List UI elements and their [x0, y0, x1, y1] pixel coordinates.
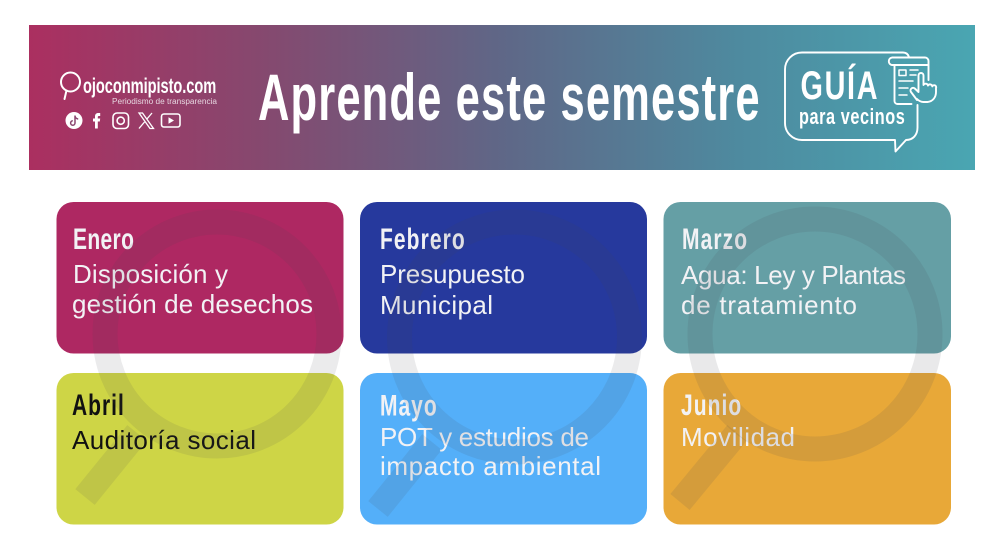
card: Mayo	[360, 373, 647, 524]
card: Abril	[56, 373, 344, 524]
card: Febrero	[360, 202, 647, 354]
topic: Presupuesto	[380, 259, 525, 289]
card: Marzo	[664, 202, 951, 354]
icon: tiktok	[66, 112, 82, 129]
topic: POT y estudios de	[380, 422, 589, 452]
topic: Movilidad	[681, 422, 795, 452]
month: Junio	[681, 390, 741, 422]
card: Junio	[664, 373, 951, 524]
topic: impacto ambiental	[380, 451, 601, 481]
icon: X	[139, 113, 154, 128]
icon: facebook	[93, 113, 100, 128]
month: Mayo	[380, 390, 437, 422]
card: Enero	[56, 202, 344, 354]
month: Abril	[72, 390, 124, 422]
month: Febrero	[380, 224, 465, 256]
icon: instagram	[113, 113, 128, 128]
watermark: magnifier right	[680, 219, 930, 502]
topic: Municipal	[380, 290, 493, 320]
logo tagline: Periodismo de transparencia	[112, 97, 218, 106]
logo name: ojoconmipisto.com	[83, 73, 216, 98]
logo	[61, 72, 218, 106]
topic: gestión de desechos	[72, 289, 313, 319]
month: Marzo	[682, 224, 747, 256]
topic: Agua: Ley y Plantas	[681, 260, 906, 290]
header banner	[29, 25, 975, 170]
icon: document with pointing hand	[889, 58, 936, 104]
speech bubble	[785, 52, 918, 152]
watermark: magnifier center	[378, 222, 630, 509]
title: Aprende este semestre	[258, 60, 760, 134]
topic: de tratamiento	[681, 290, 857, 320]
social icons	[66, 112, 180, 129]
month: Enero	[73, 224, 134, 256]
guide badge	[785, 52, 936, 152]
badge subtitle: para vecinos	[799, 105, 905, 130]
badge word: GUÍA	[800, 62, 878, 108]
watermark: magnifier left	[85, 222, 329, 497]
icon: youtube	[162, 114, 180, 127]
icon: logo magnifier	[61, 72, 80, 99]
topic: Auditoría social	[72, 425, 256, 455]
topic: Disposición y	[73, 259, 228, 289]
